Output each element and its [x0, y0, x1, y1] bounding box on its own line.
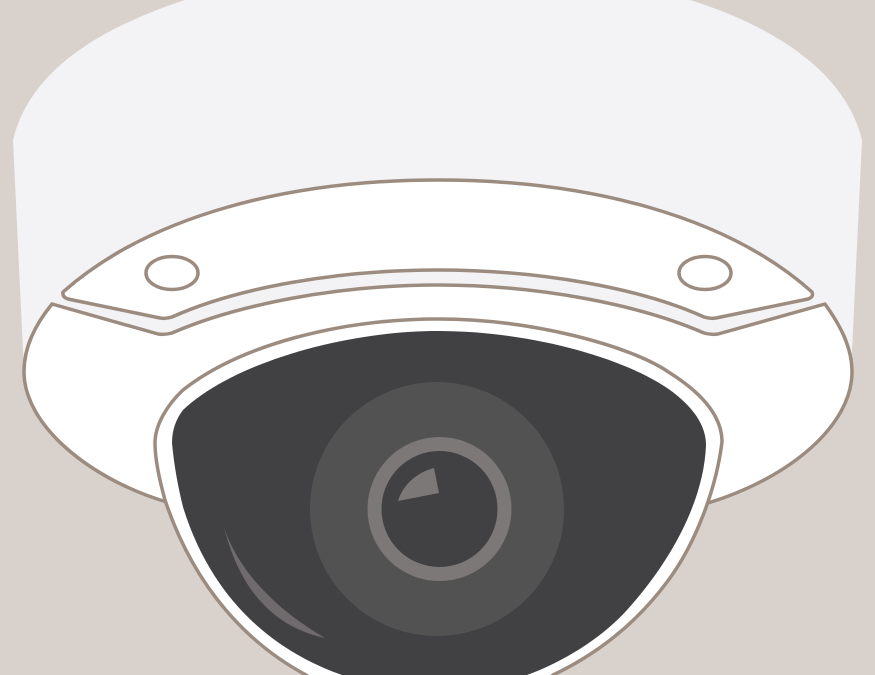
dome reflection: [223, 523, 325, 638]
lens glint: [398, 468, 439, 501]
ceiling mount housing: [13, 0, 862, 372]
lens halo: [310, 382, 564, 636]
left screw: [146, 256, 198, 290]
right screw: [679, 256, 731, 290]
lens ring: [374, 444, 504, 574]
lower ring: [24, 285, 852, 503]
top cover plate: [63, 180, 813, 318]
dome lens glass: [172, 331, 706, 675]
dome outer rim: [155, 319, 722, 675]
